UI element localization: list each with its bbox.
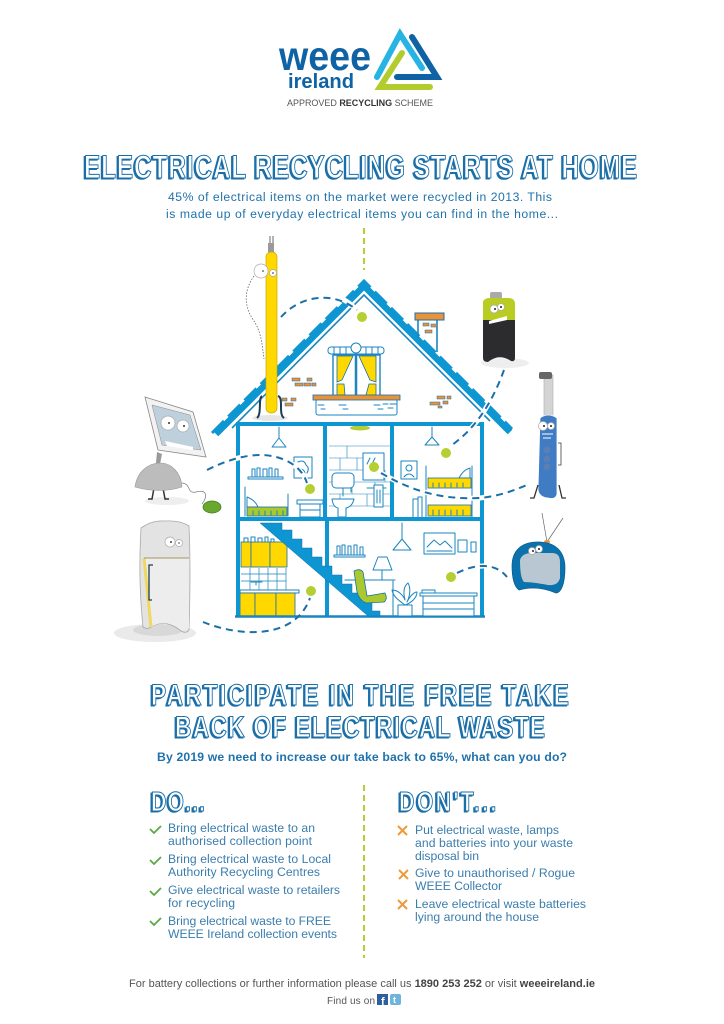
bathroom bbox=[329, 426, 391, 517]
logo: WEEE Ireland: weee bbox=[278, 33, 371, 79]
logo: WEEE Ireland: APPROVED RECYCLING SCHEME bbox=[287, 98, 433, 108]
character: fridge bbox=[114, 521, 196, 642]
don't items bbox=[398, 823, 586, 924]
logo: WEEE Ireland bbox=[278, 33, 437, 108]
don't items: WEEE Collector bbox=[415, 879, 502, 893]
icon: twitter bbox=[390, 994, 401, 1005]
roof bbox=[212, 281, 512, 434]
do items: Bring electrical waste to Local bbox=[168, 852, 331, 866]
heading: don't: DON'T... bbox=[399, 786, 496, 818]
panel: do list bbox=[150, 786, 340, 941]
green chair bbox=[354, 570, 386, 603]
intro text: is made up of everyday electrical items you can find in the home... bbox=[166, 207, 558, 221]
intro text bbox=[166, 190, 558, 221]
upper left bedroom bbox=[245, 427, 323, 517]
title: ELECTRICAL RECYCLING STARTS AT HOME bbox=[84, 150, 637, 186]
don't items: Give to unauthorised / Rogue bbox=[415, 866, 575, 880]
panel: don't list bbox=[398, 786, 586, 924]
chimney bbox=[415, 313, 444, 352]
do items: Authority Recycling Centres bbox=[168, 865, 320, 879]
attic window and balcony bbox=[313, 343, 400, 415]
don't items: Put electrical waste, lamps bbox=[415, 823, 559, 837]
do items: authorised collection point bbox=[168, 834, 313, 848]
don't items: and batteries into your waste bbox=[415, 836, 573, 850]
do items bbox=[150, 821, 340, 941]
don't items: disposal bin bbox=[415, 849, 479, 863]
character: computer monitor and mouse bbox=[135, 397, 221, 513]
icon: facebook: f bbox=[381, 996, 385, 1008]
heading: participate: BACK OF ELECTRICAL WASTE bbox=[175, 710, 545, 744]
do items: WEEE Ireland collection events bbox=[168, 927, 337, 941]
character: battery bbox=[481, 292, 529, 368]
intro text: 45% of electrical items on the market were recycled in 2013. This bbox=[168, 190, 552, 204]
heading: do: DO... bbox=[151, 786, 205, 818]
heading: participate: PARTICIPATE IN THE FREE TAKE bbox=[151, 678, 569, 712]
icon: facebook bbox=[377, 994, 388, 1008]
dashed connectors and green location dots bbox=[203, 298, 527, 632]
don't items: Leave electrical waste batteries bbox=[415, 897, 586, 911]
footer contact: For battery collections or further information please call us 1890 253 252 or visit weeeireland.ie bbox=[129, 978, 595, 990]
character: hair straightener lamp bbox=[246, 236, 288, 421]
living room bbox=[334, 523, 477, 616]
do items: Give electrical waste to retailers bbox=[168, 883, 340, 897]
icon: twitter: t bbox=[393, 995, 396, 1005]
heading: participate bbox=[151, 678, 569, 744]
house illustration bbox=[212, 281, 512, 617]
kitchen bbox=[240, 537, 299, 616]
logo: WEEE Ireland: ireland bbox=[288, 71, 354, 93]
staircase bbox=[260, 523, 380, 616]
character: electric toothbrush bbox=[530, 372, 566, 498]
subheading: take back target: By 2019 we need to increase our take back to 65%, what can you do? bbox=[157, 750, 567, 764]
character: television bbox=[512, 513, 565, 593]
upper right bedroom with bunk bed bbox=[401, 427, 472, 517]
do items: Bring electrical waste to an bbox=[168, 821, 315, 835]
do items: for recycling bbox=[168, 896, 235, 910]
wall bricks bbox=[282, 378, 451, 408]
don't items: lying around the house bbox=[415, 910, 539, 924]
find us on: Find us on bbox=[327, 996, 375, 1007]
do items: Bring electrical waste to FREE bbox=[168, 914, 331, 928]
house frame and walls bbox=[235, 424, 485, 617]
